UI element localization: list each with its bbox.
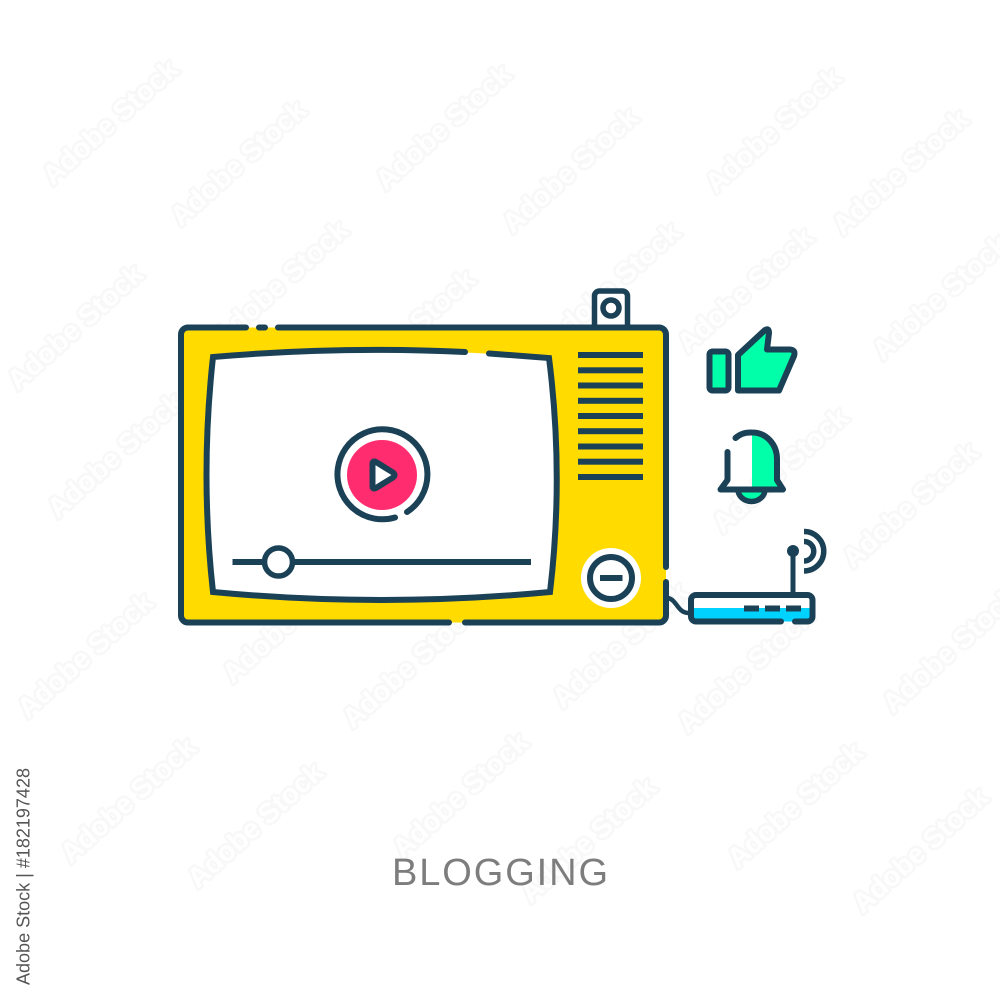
- watermark pattern: Adobe Stock: [36, 53, 184, 191]
- watermark pattern: Adobe Stock: [846, 781, 994, 919]
- TV body outline: [181, 328, 666, 622]
- TV set: [181, 328, 666, 622]
- icon: thumbs up: [710, 329, 794, 390]
- watermark pattern: Adobe Stock: [41, 386, 189, 524]
- watermark pattern: Adobe Stock: [369, 58, 517, 196]
- watermark pattern: Adobe Stock: [721, 736, 869, 874]
- watermark pattern: Adobe Stock: [54, 731, 202, 869]
- play button: [337, 429, 427, 519]
- watermark pattern: Adobe Stock: [671, 601, 819, 739]
- router antenna: [787, 545, 799, 592]
- progress slider: [232, 548, 531, 576]
- router body: [691, 595, 812, 622]
- watermark pattern: Adobe Stock: [11, 586, 159, 724]
- watermark pattern: Adobe Stock: [386, 726, 534, 864]
- vertical stock credit: Adobe Stock | #182197428: [12, 768, 34, 985]
- watermark pattern: Adobe Stock: [538, 216, 686, 354]
- watermark pattern: Adobe Stock: [336, 596, 484, 734]
- wifi signal waves: [804, 532, 824, 571]
- antenna mount tab: [594, 291, 628, 331]
- control knob: [581, 548, 641, 608]
- watermark pattern: Adobe Stock: [206, 214, 354, 352]
- icon: notification bell: [720, 432, 783, 502]
- speaker vents: [578, 352, 643, 480]
- watermark pattern: Adobe Stock: [181, 756, 329, 894]
- watermark pattern: Adobe Stock: [546, 576, 694, 714]
- screen: [206, 350, 557, 600]
- watermark pattern: Adobe Stock: [836, 436, 984, 574]
- title: Blogging: BLOGGING: [392, 852, 608, 894]
- watermark pattern: Adobe Stock: [496, 101, 644, 239]
- router cable: [668, 598, 688, 613]
- watermark pattern: Adobe Stock: [216, 551, 364, 689]
- watermark pattern: Adobe Stock: [699, 61, 847, 199]
- watermark pattern: Adobe Stock: [826, 103, 974, 241]
- wifi router: [691, 532, 824, 622]
- watermark pattern: Adobe Stock: [1, 258, 149, 396]
- watermark pattern: Adobe Stock: [164, 94, 312, 232]
- watermark pattern: Adobe Stock: [706, 401, 854, 539]
- watermark pattern: Adobe Stock: [671, 221, 819, 359]
- TV body fill: [181, 328, 666, 622]
- watermark pattern: Adobe Stock: [514, 771, 662, 909]
- watermark pattern: Adobe Stock: [333, 263, 481, 401]
